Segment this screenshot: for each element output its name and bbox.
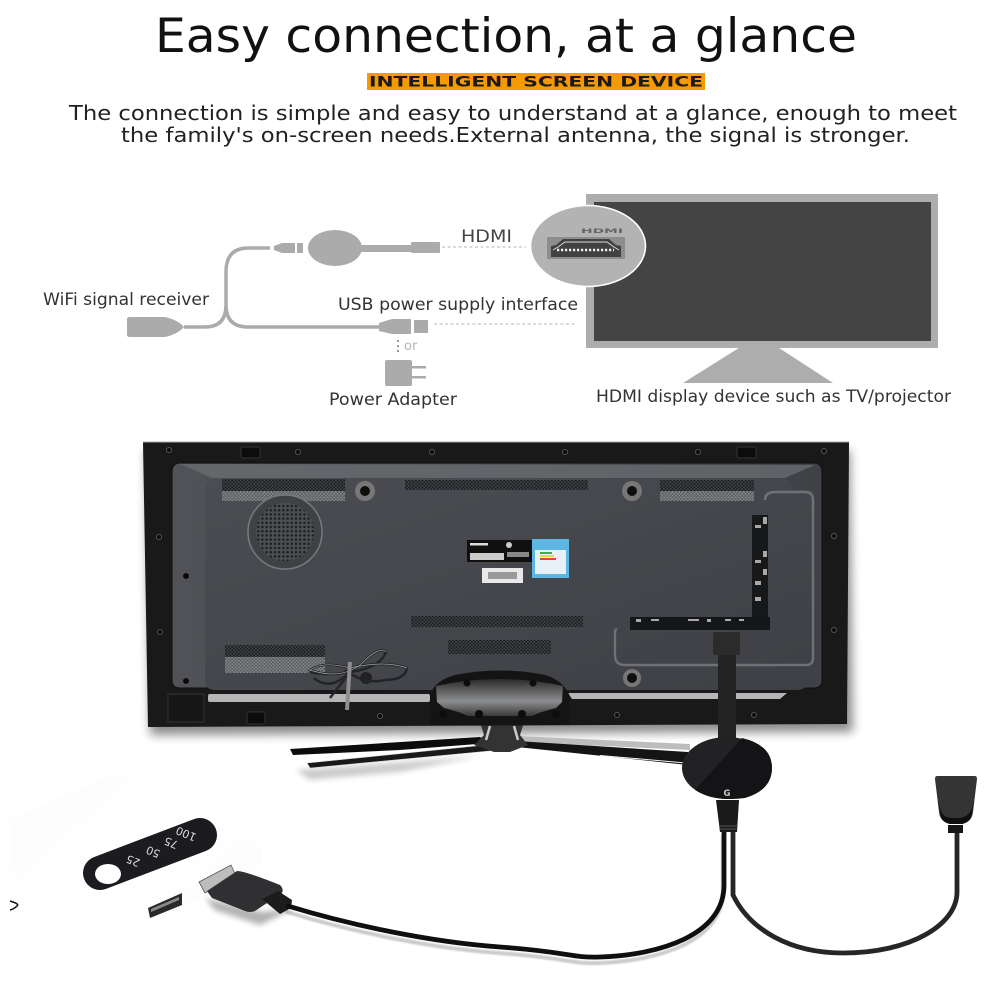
TV port strips xyxy=(630,515,770,630)
TV rim screws xyxy=(156,448,836,718)
TV port recesses xyxy=(615,492,813,665)
banner: intelligent screen device: INTELLIGENT SCREEN DEVICE xyxy=(369,74,703,90)
TV upper light bevels xyxy=(180,464,815,478)
dongle body xyxy=(682,737,772,832)
TV vents xyxy=(222,479,754,673)
label: USB power supply interface: USB power supply interface xyxy=(338,295,578,315)
HDMI dongle plug and cable xyxy=(713,632,740,739)
power bank level numbers xyxy=(124,823,198,869)
TV corner brackets xyxy=(168,447,756,724)
cables xyxy=(287,830,957,963)
power bank level numbers: 50 xyxy=(144,843,162,860)
TV outer margin plate xyxy=(172,463,822,688)
diagram: WiFi receiver plug xyxy=(127,317,184,337)
label: HDMI display device: HDMI display device such as TV/projector xyxy=(596,387,951,406)
USB cable plug xyxy=(199,865,295,925)
TV speaker grille xyxy=(248,495,322,569)
TV rating labels xyxy=(467,539,569,583)
TV stand base xyxy=(430,670,569,725)
power bank display pill xyxy=(100,835,200,873)
intro text: The connection is simple and easy to understand at a glance, enough to meet xyxy=(68,101,957,125)
diagram: USB connector xyxy=(379,319,428,334)
label: WiFi signal receiver: WiFi signal receiver xyxy=(43,290,209,309)
TV inner panel xyxy=(205,478,813,690)
power bank xyxy=(10,774,263,998)
dongle G logo: G xyxy=(724,789,731,799)
TV rear photo xyxy=(143,442,853,780)
power bank button xyxy=(95,864,121,884)
female USB plug xyxy=(935,776,977,833)
diagram: HDMI port callout: HDMI xyxy=(581,227,623,235)
diagram: power adapter xyxy=(385,360,426,386)
TV stand legs xyxy=(290,722,690,780)
dongle lower collar xyxy=(716,800,739,832)
power bank level numbers: 100 xyxy=(174,823,198,844)
label: HDMI: HDMI xyxy=(461,227,512,247)
power cord bundle xyxy=(308,650,407,710)
diagram: cables xyxy=(184,248,380,327)
intro text: the family's on-screen needs.External antenna, the signal is stronger. xyxy=(121,123,910,147)
diagram: dotted link lines xyxy=(398,247,576,354)
power bank level numbers: 25 xyxy=(124,852,142,869)
diagram: dongle xyxy=(308,230,440,266)
power bank edge mark xyxy=(10,901,18,910)
diagram: display xyxy=(586,194,938,383)
power bank body xyxy=(10,774,263,998)
diagram: top small connector xyxy=(274,243,303,253)
TV lower light strips xyxy=(208,693,787,702)
TV frame xyxy=(143,442,849,727)
label: or: or xyxy=(404,339,418,354)
TV mount screws xyxy=(355,481,642,687)
TV shadow xyxy=(146,450,853,735)
banner: intelligent screen device xyxy=(367,73,705,90)
title: Easy connection, at a glance xyxy=(155,9,857,64)
connection diagram xyxy=(43,194,951,409)
label: Power Adapter: Power Adapter xyxy=(329,390,457,409)
diagram: HDMI port callout xyxy=(530,206,646,286)
power bank level numbers: 75 xyxy=(162,834,180,851)
power bank USB port xyxy=(148,893,182,918)
intro text xyxy=(68,101,957,147)
